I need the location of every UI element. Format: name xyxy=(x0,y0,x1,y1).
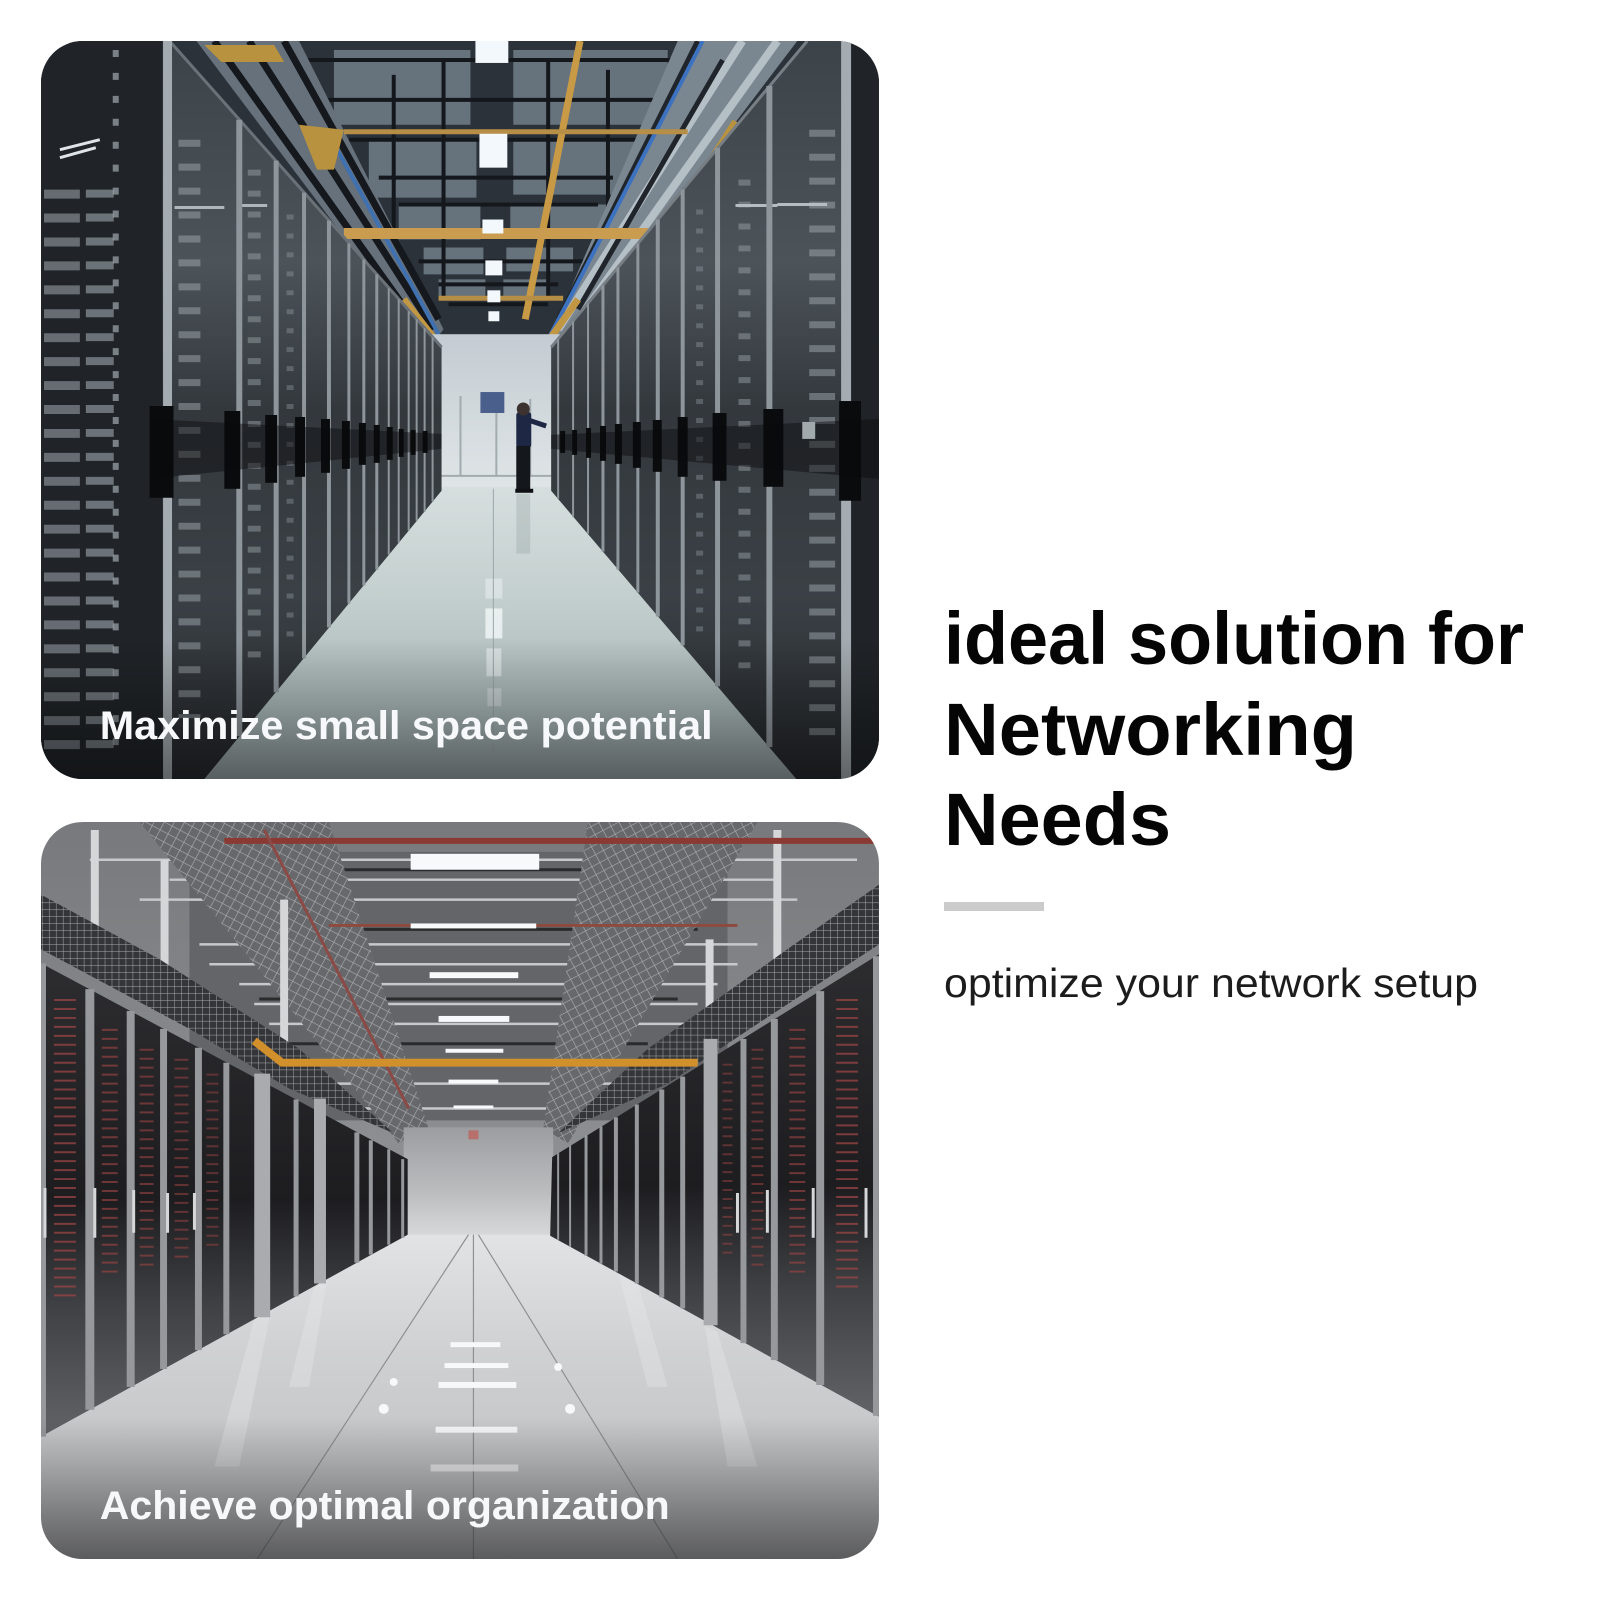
panel: dark data center aisle xyxy=(41,41,879,779)
divider bar xyxy=(944,902,1044,911)
ceiling lights xyxy=(475,41,508,321)
right rack verticals xyxy=(558,41,846,779)
right server racks xyxy=(551,41,879,779)
left rack handles xyxy=(45,1188,194,1238)
orange pipe xyxy=(254,1041,698,1063)
left rack verticals xyxy=(168,41,433,779)
floor seams xyxy=(257,1235,678,1559)
right rack handles xyxy=(560,401,861,501)
heading xyxy=(944,597,1524,861)
person technician xyxy=(515,403,546,554)
left rack frames xyxy=(43,963,403,1437)
panel: bright data center aisle xyxy=(41,822,879,1559)
ceiling lights xyxy=(411,854,539,1108)
right glass racks xyxy=(550,954,879,1417)
subheading: optimize your network setup xyxy=(944,960,1478,1006)
heading: ideal solution for xyxy=(944,597,1524,680)
right rack status lights xyxy=(728,999,847,1287)
heading: Networking xyxy=(944,688,1357,771)
bottom shade xyxy=(41,638,879,779)
left glass racks xyxy=(41,963,408,1437)
bottom shade xyxy=(41,1417,879,1559)
caption: maximize small space potential: Maximize small space potential xyxy=(100,704,713,748)
left rack handles xyxy=(150,406,428,498)
heading: Needs xyxy=(944,778,1171,861)
side cable trays xyxy=(41,895,394,1133)
floor side reflections xyxy=(214,1342,757,1466)
far wall xyxy=(429,334,563,489)
door frame xyxy=(442,396,552,477)
left rack vents xyxy=(62,50,290,758)
left rack reflections xyxy=(60,140,100,158)
caption: achieve optimal organization: Achieve optimal organization xyxy=(100,1484,670,1528)
floor xyxy=(204,487,796,779)
rack label tag xyxy=(802,422,815,439)
wall control box xyxy=(480,392,504,413)
left server racks xyxy=(41,41,442,779)
far wall xyxy=(404,1127,553,1237)
right rack reflections xyxy=(735,203,827,207)
right rack frames xyxy=(558,956,876,1416)
right rack vents xyxy=(700,130,822,738)
ceiling structure xyxy=(41,822,879,1160)
ceiling with cable trays xyxy=(41,41,879,350)
right rack handles xyxy=(737,1188,866,1238)
floor light reflections xyxy=(379,1342,575,1471)
exit sign xyxy=(468,1130,478,1139)
left rack status lights xyxy=(65,999,212,1297)
floor xyxy=(41,1235,879,1559)
floor light reflections xyxy=(485,488,502,731)
